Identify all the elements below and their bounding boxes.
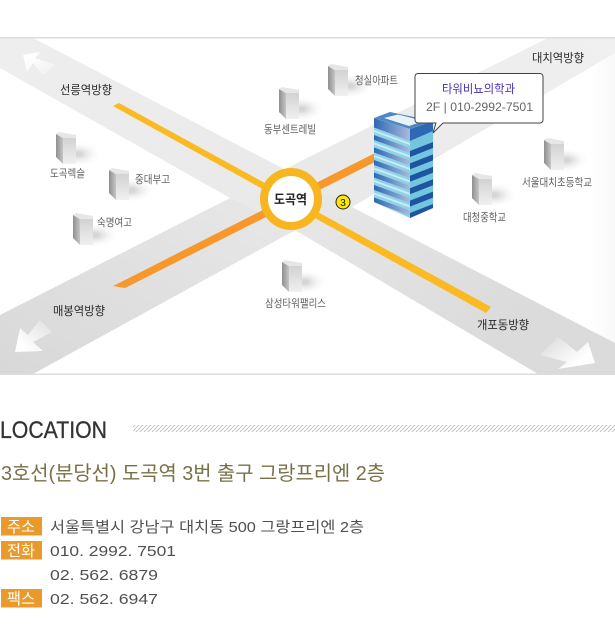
address row: 서울특별시 강남구 대치동 500 그랑프리엔 2층 (50, 519, 364, 536)
arrow: to Maebong (15, 320, 52, 352)
label: Dogok Rexle: 도곡렉슬 (50, 167, 85, 180)
label: Gaepo direction: 개포동방향 (477, 318, 529, 332)
label: Samsung Tower Palace: 삼성타워팰리스 (265, 297, 326, 310)
phone row: 전화 (7, 542, 35, 560)
heading: location: LOCATION (0, 417, 107, 444)
map panel (0, 37, 615, 375)
callout: 타워비뇨의학과 (442, 82, 515, 96)
fax row: 02. 562. 6947 (50, 591, 158, 608)
label: Cheongsil: 청실아파트 (355, 74, 398, 87)
label: Daechi direction: 대치역방향 (532, 51, 584, 65)
icon: building Dongbu Centreville (277, 87, 325, 122)
fax row: 팩스 (7, 590, 35, 608)
fax row (1, 589, 158, 608)
icon: building Daecheong middle school (470, 173, 518, 208)
label: Maebong direction: 매봉역방향 (53, 304, 105, 318)
label: Sookmyung: 숙명여고 (97, 216, 132, 229)
orange line (113, 153, 375, 288)
icon: building Dogok Rexle (54, 132, 102, 167)
label: Daecheong middle school: 대청중학교 (463, 211, 506, 224)
subheading: directions: 3호선(분당선) 도곡역 3번 출구 그랑프리엔 2층 (1, 462, 385, 485)
road: northeast to southwest (0, 38, 615, 374)
phone row (1, 541, 176, 584)
phone row: 02. 562. 6879 (50, 567, 158, 584)
icon: building Cheongsil apartment (326, 64, 374, 99)
callout (415, 74, 543, 133)
exit 3 marker (336, 195, 350, 209)
icon: building Jungdae high school (107, 168, 155, 203)
label: Seoul Daechi elementary: 서울대치초등학교 (522, 176, 592, 189)
icon: building Seoul Daechi elementary (542, 138, 590, 173)
station circle: 도곡역 (274, 192, 307, 207)
callout: 2F | 010-2992-7501 (426, 100, 533, 114)
icon: clinic tower (374, 112, 433, 222)
station circle (260, 168, 322, 230)
icon: building Samsung Tower Palace (280, 260, 328, 295)
phone row: 010. 2992. 7501 (50, 543, 176, 560)
arrow: to Gaepo (540, 337, 595, 369)
exit 3 marker: 3 (340, 198, 346, 209)
road: northwest to southeast (0, 38, 615, 374)
address row: 주소 (7, 519, 35, 536)
icon: building Sookmyung girls school (71, 213, 119, 248)
yellow line (113, 103, 491, 313)
label: Jungdae: 중대부고 (135, 173, 170, 186)
label: Dongbu Centreville: 동부센트레빌 (264, 123, 316, 136)
arrow: to Seolleung (23, 52, 55, 75)
label: Seolleung direction: 선릉역방향 (60, 83, 112, 97)
